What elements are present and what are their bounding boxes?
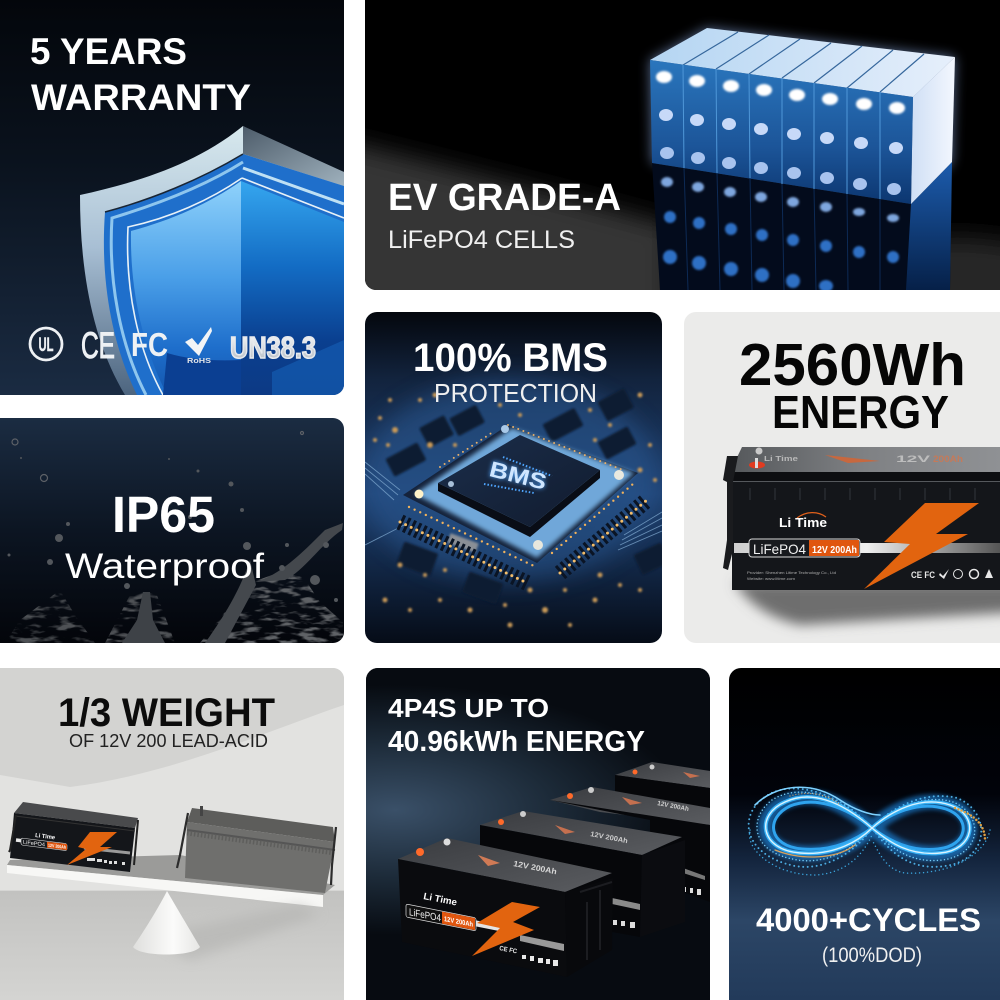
subheading: 100% DOD: (100%DOD) <box>822 944 922 967</box>
cell front faces <box>650 60 913 204</box>
heading: 5 years warranty: 5 YEARS <box>30 31 187 72</box>
subheading: LiFePO4 cells: LiFePO4 CELLS <box>388 226 575 254</box>
icon: UN38.3: UN38.3 <box>230 330 316 365</box>
silver strip <box>734 543 1000 553</box>
heading: EV grade-A: EV GRADE-A <box>388 177 621 219</box>
illustration: battery three: 12V 200Ah <box>657 800 689 813</box>
icon: CE: CE <box>81 325 115 366</box>
panel: 4000+ cycles <box>729 668 1000 1000</box>
illustration: battery four <box>615 762 710 810</box>
illustration: Li Time battery: 12V <box>896 454 930 464</box>
illustration: glowing battery cells <box>650 28 955 292</box>
illustration: LiFePO4 battery: Li Time <box>35 833 56 841</box>
illustration: front battery: 12V 200Ah <box>444 916 473 929</box>
provider text: Provider: Shenzhen Litime Technology Co., Ltd <box>747 571 836 575</box>
panel: 100% BMS protection <box>360 312 670 643</box>
illustration: battery two: 12V 200Ah <box>590 831 628 845</box>
icon: orange lightning bolt <box>864 503 979 589</box>
battery label: LiFePO4 <box>753 541 806 557</box>
provider text <box>747 572 836 580</box>
compliance icons <box>911 569 993 580</box>
heading: 4000+ cycles: 4000+CYCLES <box>756 902 981 938</box>
illustration: front battery: 12V 200Ah <box>513 859 558 876</box>
illustration: front battery: CE FC <box>499 945 518 955</box>
subheading: waterproof: Waterproof <box>65 547 264 586</box>
icon: UL: UL <box>38 335 54 356</box>
provider text: Website: www.litime.com <box>747 577 795 581</box>
battery label <box>749 539 860 557</box>
icon: BMS chip: BMS <box>487 456 549 495</box>
illustration: Li Time battery: 200Ah <box>933 454 963 464</box>
seesaw cone <box>133 891 200 954</box>
panel: 2560Wh energy <box>684 312 1000 643</box>
illustration: front battery: LiFePO4 <box>409 907 441 924</box>
icon: UL <box>30 328 62 360</box>
heading: 2560Wh: 2560Wh <box>739 332 966 398</box>
panel: 1/3 weight <box>0 668 344 1000</box>
brand logo: Li Time <box>779 515 827 530</box>
heading: 4P4S up to: 4P4S UP TO <box>388 693 549 723</box>
illustration: LiFePO4 battery <box>9 802 138 872</box>
subheading: of 12V 200 lead-acid: OF 12V 200 LEAD-ACID <box>69 731 268 751</box>
brand logo <box>780 512 827 527</box>
heading: 1/3 weight: 1/3 WEIGHT <box>58 691 275 735</box>
heading: 5 years warranty <box>31 38 250 110</box>
illustration: seesaw <box>7 855 335 960</box>
heading: 5 years warranty: WARRANTY <box>31 77 251 118</box>
illustration: battery two <box>480 811 685 937</box>
illustration: Li Time battery <box>723 447 1000 590</box>
panel: IP65 waterproof <box>0 418 344 643</box>
battery label: 12V 200Ah <box>812 545 857 556</box>
cell terminals <box>656 71 905 195</box>
illustration: water splash <box>5 432 343 643</box>
circuit board details <box>360 380 670 628</box>
icons: certification logos <box>28 326 316 363</box>
illustration: front battery <box>398 838 613 977</box>
icon: FCC: FC <box>131 326 168 363</box>
icon: BMS chip <box>438 435 600 537</box>
icon: blue shield <box>80 126 344 395</box>
heading: 40.96kWh energy: 40.96kWh ENERGY <box>388 726 645 758</box>
icon: BMS chip: BMS <box>487 456 549 495</box>
chip substrate and pins <box>400 425 647 583</box>
panel: 5 years warranty <box>0 0 344 395</box>
illustration: lead-acid battery <box>177 806 336 893</box>
cell side face <box>911 57 955 204</box>
heading: 100% BMS: 100% BMS <box>413 336 608 380</box>
icon: RoHS check <box>185 327 212 365</box>
icon: infinity particle loop <box>749 787 990 875</box>
icon: RoHS check: RoHS <box>187 356 211 365</box>
subheading: protection: PROTECTION <box>434 378 597 408</box>
heading: IP65: IP65 <box>112 486 215 543</box>
panel: EV grade-A cells <box>365 0 1000 290</box>
illustration: LiFePO4 battery: 12V 200Ah <box>48 843 66 850</box>
reflection of cells <box>652 162 952 292</box>
panel: 4P4S energy <box>366 668 710 1000</box>
illustration: front battery: Li Time <box>422 891 458 908</box>
heading: energy: ENERGY <box>772 386 949 438</box>
illustration: battery three <box>550 787 710 902</box>
cell top faces <box>650 28 955 97</box>
illustration: LiFePO4 battery: LiFePO4 <box>23 840 45 848</box>
compliance icons: CE FC <box>911 570 935 580</box>
illustration: Li Time battery: Li Time <box>764 456 798 463</box>
